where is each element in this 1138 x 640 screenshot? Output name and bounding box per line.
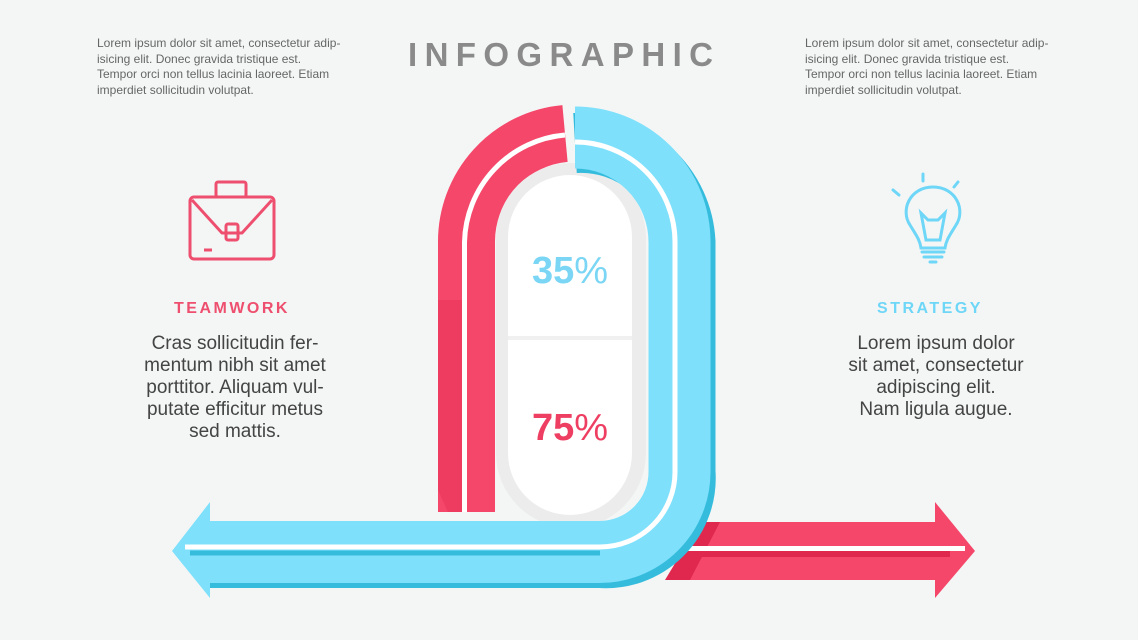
value 75%: 75% — [532, 407, 608, 449]
text block: top right: imperdiet sollicitudin volutpat. — [805, 82, 962, 96]
text: strategy: adipiscing elit. — [876, 377, 996, 398]
capsule — [508, 175, 632, 515]
red loop band — [438, 134, 565, 512]
text: strategy: sit amet, consectetur — [848, 355, 1024, 376]
text block: top right: Tempor orci non tellus lacinia laoreet. Etiam — [805, 67, 1037, 81]
text: strategy — [848, 333, 1024, 420]
text block: top right — [805, 36, 1048, 96]
capsule halo — [496, 163, 646, 528]
icon: briefcase — [190, 182, 274, 259]
red right arrow — [665, 502, 975, 598]
title: INFOGRAPHIC — [408, 36, 720, 73]
text block: top left: isicing elit. Donec gravida tristique est. — [97, 52, 301, 66]
heading: strategy: STRATEGY — [877, 300, 983, 317]
text block: top left — [97, 36, 340, 96]
text: strategy: Lorem ipsum dolor — [857, 333, 1015, 354]
icon: light bulb — [893, 174, 960, 262]
value 35%: 35% — [532, 250, 608, 292]
blue loop and left arrow band — [185, 138, 686, 558]
text block: top left: imperdiet sollicitudin volutpat. — [97, 82, 254, 96]
text: strategy: Nam ligula augue. — [859, 399, 1013, 420]
text: teamwork — [144, 333, 326, 442]
heading: teamwork: TEAMWORK — [174, 300, 290, 317]
text: teamwork: Cras sollicitudin fer- — [152, 333, 318, 354]
text: teamwork: porttitor. Aliquam vul- — [146, 377, 324, 398]
left blue arrow head — [172, 502, 210, 598]
text block: top right: Lorem ipsum dolor sit amet, consectetur adip- — [805, 36, 1048, 50]
text block: top left: Lorem ipsum dolor sit amet, consectetur adip- — [97, 36, 340, 50]
text: teamwork: sed mattis. — [189, 421, 281, 442]
text: teamwork: mentum nibh sit amet — [144, 355, 326, 376]
text: teamwork: putate efficitur metus — [147, 399, 323, 420]
text block: top left: Tempor orci non tellus lacinia laoreet. Etiam — [97, 67, 329, 81]
text block: top right: isicing elit. Donec gravida tristique est. — [805, 52, 1009, 66]
